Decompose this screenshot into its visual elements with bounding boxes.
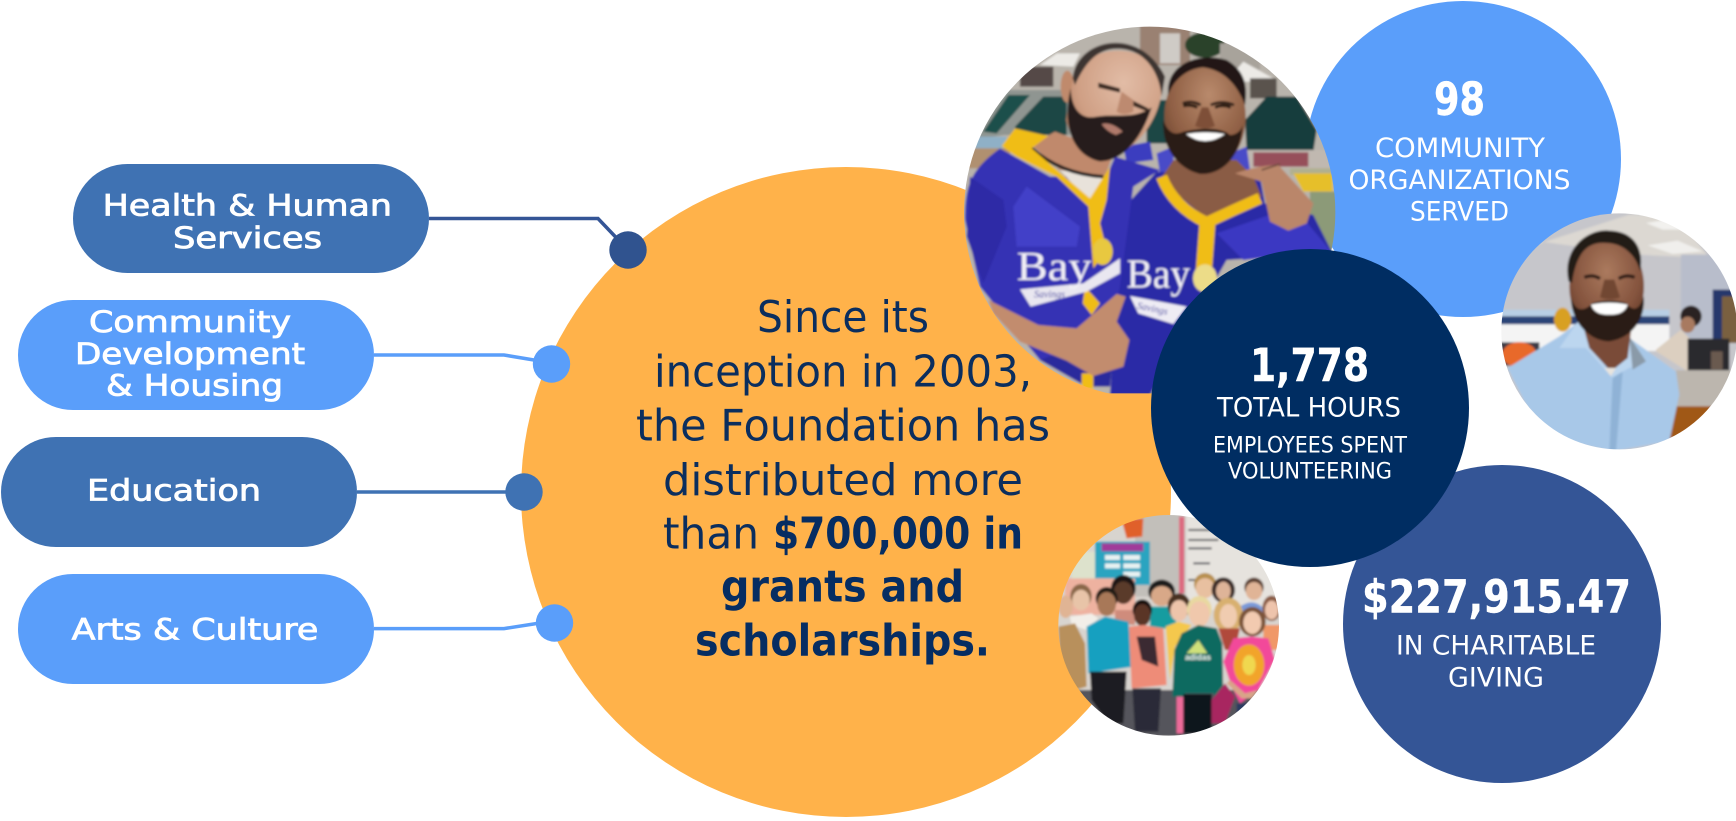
central statement text: the Foundation has [636,401,1050,452]
stat circle: community organizations served: SERVED [1410,197,1509,228]
face [1568,240,1646,312]
central statement text: inception in 2003, [654,347,1032,398]
connector: arts and culture [374,604,573,642]
shirt [1508,321,1679,451]
pill: health and human services: Services [173,221,322,255]
pill: community development and housing: & Housing [106,369,283,403]
photo: two employees in jerseys at ballpark: Savings [1034,289,1065,300]
photo: smiling employee in office [1496,208,1736,455]
stat circle: total volunteer hours [1151,249,1469,567]
right man's hand [1235,165,1313,231]
stat circle: charitable giving: GIVING [1448,663,1544,694]
photo: two employees in jerseys at ballpark: Bay [1127,250,1190,296]
connector: education [357,473,543,511]
stat circle: total volunteer hours: TOTAL HOURS [1216,393,1401,424]
pill: arts and culture [18,574,374,684]
pill: community development and housing: Community [89,305,291,339]
stat circle: charitable giving: $227,915.47 [1362,571,1631,624]
sponsor marks on jerseys [1020,258,1120,307]
central statement text: $700,000 in [773,509,1023,560]
central statement text: than [663,509,759,560]
panel: central orange circle [521,167,1171,817]
neck of left man [1032,132,1113,177]
back players [1123,142,1153,163]
central statement text: grants and [721,562,964,613]
stat circle: community organizations served: COMMUNITY [1375,133,1546,164]
green hoodie child [1186,595,1212,616]
back row kids [1115,610,1135,625]
central statement text: distributed more [663,455,1023,506]
pill: education [1,437,357,547]
yellow shirt child [1168,593,1190,619]
photo: two employees in jerseys at ballpark: Bay [1017,243,1092,289]
blonde girl [1214,598,1243,632]
photo: two employees in jerseys at ballpark: Savings [1136,301,1169,318]
tie dye shirt child [1239,607,1266,636]
pill: health and human services [73,164,429,273]
stat circle: total volunteer hours: EMPLOYEES SPENT [1213,434,1408,459]
pill: health and human services: Health & Human [103,189,392,223]
stat circle: community organizations served: ORGANIZATIONS [1348,165,1570,196]
stat circle: community organizations served: 98 [1434,73,1485,126]
pill: community development and housing: Development [75,337,305,371]
neck [1584,329,1632,370]
central statement text [636,292,1050,667]
stat circle: community organizations served [1305,1,1621,317]
pill: education: Education [87,474,261,508]
left man jersey [965,148,1160,387]
photo: two employees in jerseys at ballpark [960,20,1340,400]
neck of right man [1160,160,1262,218]
pill: arts and culture: Arts & Culture [72,612,318,646]
pill: community development and housing [18,300,374,410]
stat circle: charitable giving [1343,465,1661,783]
salmon shirt child [1133,599,1152,621]
left man's arm and thumbs up [988,294,1129,376]
central statement text: scholarships. [695,616,990,667]
brown shirt child [1058,623,1087,690]
stat circle: charitable giving: IN CHARITABLE [1396,630,1596,661]
stat circle: total volunteer hours: VOLUNTEERING [1228,460,1392,485]
teal shirt child [1096,587,1118,610]
photo: schoolchildren in classroom: adidas [1185,652,1211,662]
connector: health and human services [429,218,647,269]
connector: community development and housing [374,345,570,383]
right man head [1162,66,1248,154]
right man jersey [1110,172,1333,395]
stat circle: total volunteer hours: 1,778 [1250,339,1369,392]
left man head [1061,71,1074,103]
photo: schoolchildren in classroom [1058,515,1279,736]
central statement text: Since its [757,292,929,343]
